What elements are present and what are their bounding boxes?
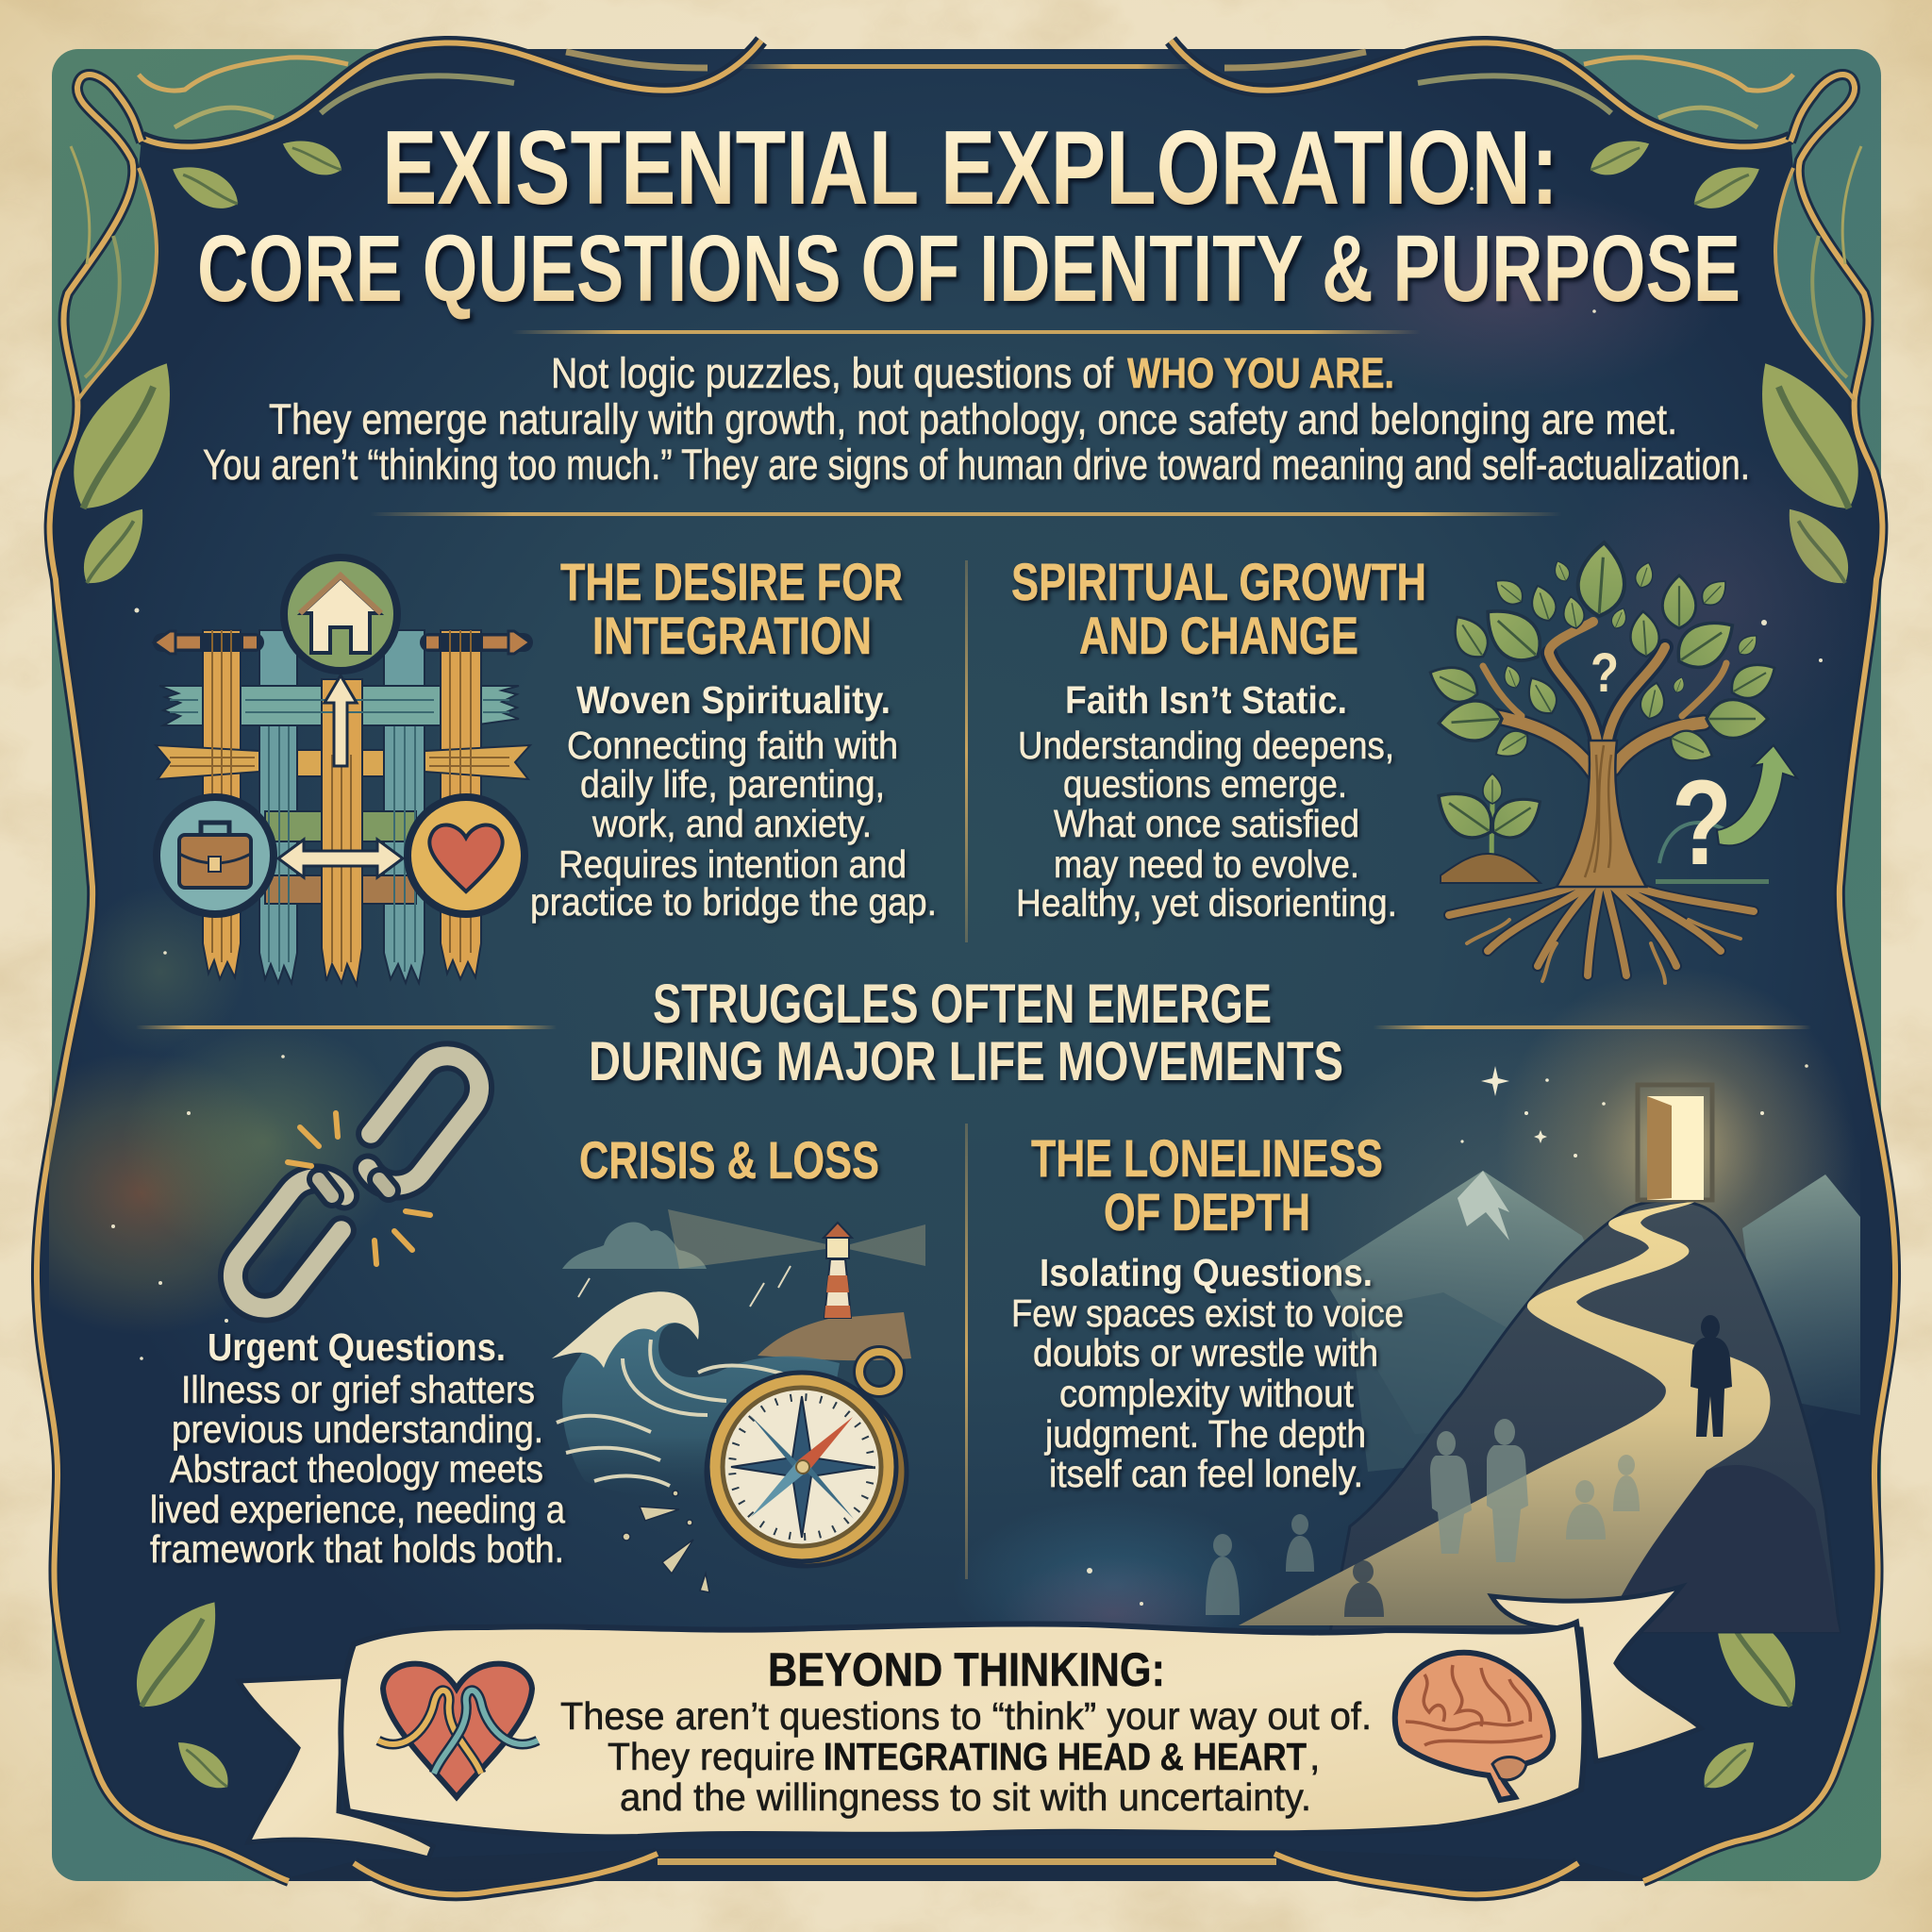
text block: practice to bridge the gap. — [530, 880, 937, 924]
text block: previous understanding. — [172, 1407, 543, 1451]
scroll body — [341, 1623, 1584, 1837]
icon: growing tree with question marks — [1424, 541, 1797, 983]
scroll right tail — [1491, 1587, 1701, 1761]
heading — [1011, 552, 1426, 665]
text block: Abstract theology meets — [170, 1447, 543, 1491]
banner text: BEYOND THINKING: — [768, 1643, 1165, 1696]
text block: Requires intention and — [558, 842, 907, 886]
winding path — [1239, 1201, 1771, 1625]
text block: What once satisfied — [1054, 802, 1359, 845]
title — [197, 109, 1740, 322]
heading: SPIRITUAL GROWTH — [1011, 552, 1426, 611]
text block: judgment. The depth — [1044, 1412, 1366, 1456]
broken glass shards — [623, 1491, 709, 1592]
banner: beyond thinking scroll — [239, 1587, 1701, 1858]
text block — [530, 678, 937, 924]
decorative frame: right half — [966, 41, 1895, 1894]
wave — [552, 1266, 840, 1498]
heading: AND CHANGE — [1079, 606, 1358, 665]
door glow — [1517, 984, 1840, 1258]
section: the desire for integration — [530, 552, 937, 924]
title: EXISTENTIAL EXPLORATION: — [382, 109, 1558, 226]
icon: woven threads with home, work and heart — [154, 558, 530, 985]
text block: Isolating Questions. — [1040, 1251, 1373, 1294]
heading: THE DESIRE FOR — [560, 552, 903, 611]
illustration: mountain path toward lit door — [1206, 967, 1896, 1632]
center heading: struggles: STRUGGLES OFTEN EMERGE — [653, 974, 1272, 1035]
banner text: They require — [608, 1735, 815, 1778]
banner text: , — [1309, 1735, 1320, 1778]
intro text block: Not logic puzzles, but questions of — [551, 349, 1113, 397]
heading: OF DEPTH — [1104, 1182, 1310, 1241]
decorative frame: left half — [37, 41, 966, 1894]
heading — [560, 552, 903, 665]
text block: framework that holds both. — [150, 1527, 564, 1571]
main silhouette figure — [1690, 1315, 1732, 1437]
banner text: These aren’t questions to “think” your way out of. — [560, 1694, 1372, 1738]
icon: question mark small: ? — [1591, 642, 1619, 704]
icon: question mark large with rising arrow — [1656, 745, 1797, 891]
heading: INTEGRATION — [592, 606, 872, 665]
text block: Healthy, yet disorienting. — [1016, 881, 1397, 924]
intro text block: WHO YOU ARE. — [1127, 349, 1394, 397]
heading — [1031, 1128, 1383, 1241]
cloud — [562, 1223, 707, 1269]
stars — [1460, 1066, 1764, 1158]
banner text — [560, 1643, 1372, 1819]
section: crisis and loss — [150, 1130, 879, 1571]
lower rock — [1604, 1465, 1840, 1632]
scroll left tail — [239, 1676, 433, 1858]
text block: questions emerge. — [1063, 762, 1347, 806]
distant mountains — [1321, 1171, 1860, 1472]
text block: may need to evolve. — [1054, 842, 1359, 886]
compass — [707, 1352, 907, 1566]
text block: Illness or grief shatters — [181, 1368, 535, 1411]
heading: THE LONELINESS — [1031, 1128, 1383, 1188]
text block — [1011, 1251, 1404, 1495]
center heading: struggles: DURING MAJOR LIFE MOVEMENTS — [589, 1031, 1343, 1092]
glowing door — [1638, 1085, 1712, 1200]
text block — [150, 1325, 565, 1571]
illustration: storm sea with lighthouse and compass — [552, 1209, 925, 1592]
text block: Urgent Questions. — [208, 1325, 506, 1369]
icon: seedling — [1427, 774, 1550, 883]
text block: Understanding deepens, — [1018, 724, 1394, 767]
text block: Woven Spirituality. — [576, 678, 891, 722]
banner text: and the willingness to sit with uncertainty. — [620, 1775, 1311, 1819]
text block: Few spaces exist to voice — [1011, 1291, 1404, 1335]
section: the loneliness of depth — [1011, 1128, 1404, 1495]
text block: Connecting faith with — [567, 724, 898, 767]
text block: Faith Isn’t Static. — [1065, 678, 1347, 722]
icon: brain — [1395, 1653, 1553, 1800]
icon: broken chain — [220, 1043, 492, 1321]
intro text block — [203, 349, 1750, 489]
text block: complexity without — [1059, 1372, 1355, 1415]
lighthouse with beam — [668, 1209, 925, 1360]
cosmic nebula background — [0, 187, 1877, 1670]
text block — [1016, 678, 1397, 924]
section: spiritual growth and change — [1011, 552, 1426, 924]
banner text: INTEGRATING HEAD & HEART — [824, 1735, 1307, 1778]
faded crowd figures — [1206, 1419, 1640, 1617]
center heading: struggles — [589, 974, 1343, 1092]
main hill — [1330, 1201, 1840, 1632]
text block: daily life, parenting, — [580, 762, 885, 806]
icon: question mark large with rising arrow: ? — [1672, 756, 1732, 891]
text block: lived experience, needing a — [150, 1488, 565, 1531]
icon: heart with intertwined ribbons — [378, 1664, 538, 1797]
heading: CRISIS & LOSS — [579, 1130, 879, 1190]
intro text block: They emerge naturally with growth, not pathology, once safety and belonging are met. — [269, 395, 1677, 443]
text block: doubts or wrestle with — [1033, 1331, 1378, 1374]
sky haze — [1343, 1057, 1812, 1327]
text block: work, and anxiety. — [591, 802, 872, 845]
text block: itself can feel lonely. — [1049, 1452, 1363, 1495]
